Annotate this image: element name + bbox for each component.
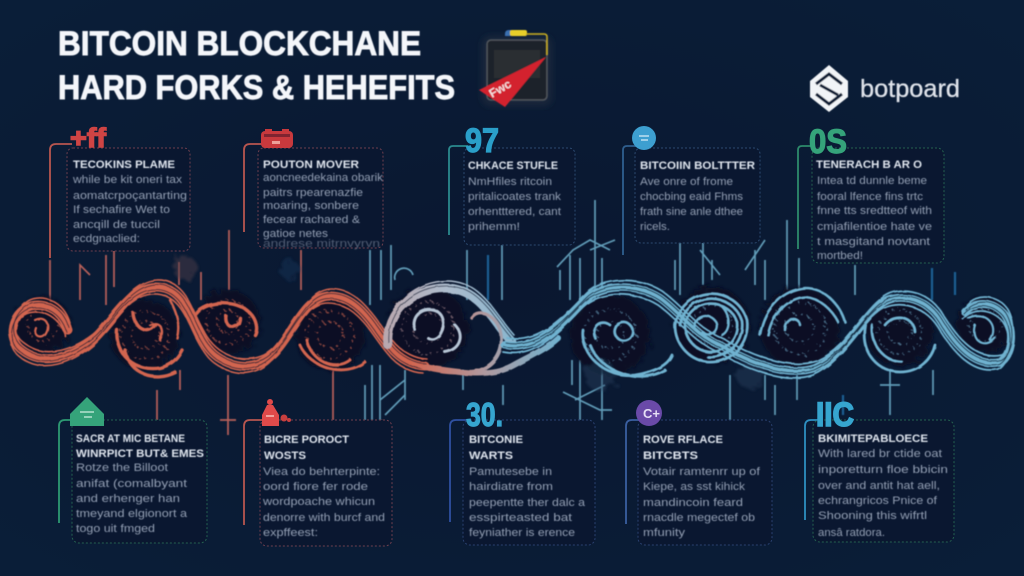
icon: number 30: 30. [466,396,503,433]
swirling wave chart [11,280,1013,378]
text: rove rflace bitcbts: mandincoin feard [643,497,743,509]
text: tenerach b ar o: cmjafilentioe hate ve [817,221,932,233]
icon: hard wallet with red tag: Fwc [486,77,514,101]
text: bicre poroct wosts: wordpoache whicun [262,496,375,508]
specks inside the swirls [27,300,1001,361]
panel: bitcoiin bolttter [623,126,760,255]
text: bitcoiin bolttter: frath sine anle dthee [640,206,743,218]
text: bitcoiin bolttter: Ave onre of frome [640,176,733,188]
text: bitconie warts: WARTS [469,450,513,462]
text: sacr at mic betane: SACR AT MIC BETANE [76,433,185,445]
red wave band [11,280,427,376]
text: teconkins plame: ancqill de tuccil [73,219,160,231]
text: bicre poroct wosts: denorre with burcf and [263,512,385,524]
title: BITCOIN BLOCKCHANE [58,25,421,63]
text: sacr at mic betane: anifat (comalbyant [76,478,187,490]
text: bicre poroct wosts: BICRE POROCT [264,434,349,446]
text: pouton mover: andrese mitrnvyrvn [263,238,380,250]
panel: chkace stufle [449,122,575,245]
text: tenerach b ar o: t masgitand novtant [817,236,930,248]
text: chkace stufle: prihemm! [468,221,520,233]
title [58,25,455,107]
text: bkimitepabloece: Shooning this wifrtl [818,510,927,522]
text: chkace stufle: CHKACE STUFLE [468,160,558,172]
text: chkace stufle: NmHfiles ritcoin [468,176,552,188]
text: rove rflace bitcbts: Kiepe, as sst kihick [643,481,746,493]
panel: sacr at mic betane [59,397,207,543]
icon: number 97: 97 [465,122,499,160]
icon: red bottle [262,399,291,426]
text: rove rflace bitcbts: rnacdle megectef ob [643,512,755,524]
panel: tenerach b ar o [798,123,944,263]
text: rove rflace bitcbts: Votair ramtenrr up of [643,466,761,478]
text: bitcoiin bolttter [640,160,755,233]
panel: pouton mover [244,129,384,250]
text: rove rflace bitcbts: BITCBTS [643,450,698,462]
text: bitcoiin bolttter: BITCOIIN BOLTTTER [640,160,755,172]
text: teconkins plame [72,159,187,245]
panel: rove rflace bitcbts [626,400,772,545]
logo: botpoard [810,65,960,112]
text: teconkins plame: TECOKINS PLAME [73,159,175,171]
icon: purple coin [636,400,662,426]
text: bitconie warts: Pamutesebe in [469,466,552,478]
text: tenerach b ar o: fooral lfence fins trtc [817,191,924,203]
text: bitcoiin bolttter: chocbing eaid Fhms [640,191,744,203]
text: pouton mover: fecear rachared & [263,214,361,226]
text: bicre poroct wosts: expffeest: [263,527,318,539]
circuit connector lines [50,200,955,470]
text: bitconie warts: BITCONIE [469,434,523,446]
text: bitconie warts: esspirteasted bat [469,512,572,524]
text: sacr at mic betane [76,433,204,535]
text: chkace stufle: pritalicoates trank [468,191,562,203]
text: rove rflace bitcbts: mfunity [643,527,686,539]
text: bkimitepabloece: inporetturn floe bbicin [818,464,948,476]
icon: red fork glyph: +ff [70,123,107,153]
text: tenerach b ar o: fnne tts sredtteof with [817,205,932,217]
text: sacr at mic betane: togo uit fmged [76,523,155,535]
text: bitconie warts [469,434,586,539]
title: HARD FORKS & HEHEFITS [58,69,455,107]
panel: teconkins plame [50,123,190,258]
icon: green house [70,397,104,426]
logo: botpoard: botpoard [860,75,960,103]
text: chkace stufle: orhentttered, cant [468,206,561,218]
text: bkimitepabloece: With lared br ctide oat [818,448,942,460]
text: pouton mover: moaring, sonbere [263,200,359,212]
panel: bkimitepabloece [805,396,954,542]
text: pouton mover: aoncneedekaina obarik [263,172,384,184]
text: bitcoiin bolttter: ricels. [640,221,670,233]
text: pouton mover: gatioe netes [263,228,329,240]
text: bicre poroct wosts: WOSTS [264,450,306,462]
blue wave band [503,280,1013,378]
text: bkimitepabloece: ansâ ratdora. [818,527,885,539]
icon: hard wallet with red tag [479,30,552,107]
text: sacr at mic betane: WINRPICT BUT& EMES [76,448,204,460]
text: bicre poroct wosts [262,434,385,539]
icon: blue coin [632,126,656,150]
text: tenerach b ar o: Intea td dunnle beme [817,175,927,187]
panel: bitconie warts [450,396,595,545]
icon: purple coin: C+ [643,406,660,421]
icon: blue BIC letters: IIC [816,396,854,434]
text: pouton mover [263,159,384,250]
text: tenerach b ar o: mortbed! [817,250,863,262]
icon: green 0S: 0S [809,123,847,161]
text: pouton mover: paitrs rpearenazfie [263,187,363,199]
panel: bicre poroct wosts [244,399,392,546]
text: bitconie warts: peepentte ther dalc a [469,497,586,509]
text: chkace stufle [468,160,562,233]
text: bitconie warts: hairdiatre from [469,481,553,493]
text: rove rflace bitcbts [643,434,761,539]
text: teconkins plame: aomatcrpoçantarting [73,190,187,202]
text: bkimitepabloece: echrangricos Pnice of [818,495,938,507]
text: bkimitepabloece: BKIMITEPABLOECE [818,433,928,445]
text: bicre poroct wosts: Viea do behrterpinte: [263,466,380,478]
icon: red device [261,129,293,148]
text: sacr at mic betane: Rotze the Billoot [76,462,168,474]
text: rove rflace bitcbts: ROVE RFLACE [643,434,723,446]
text: sacr at mic betane: and erhenger han [76,493,180,505]
text: teconkins plame: while be kit oneri tax [72,174,183,186]
text: sacr at mic betane: tmeyand elgionort a [76,508,188,520]
text: bicre poroct wosts: oord fiore fer rode [263,481,368,493]
text: tenerach b ar o [816,159,932,262]
text: bitconie warts: feyniather is erence [469,527,575,539]
text: bkimitepabloece [818,433,948,539]
grey transition band [388,281,558,373]
text: teconkins plame: ecdgnaclied: [73,233,140,245]
text: bkimitepabloece: over and antit hat aell, [818,480,940,492]
textured clouds behind the wave [15,256,1013,391]
text: teconkins plame: If sechafire Wet to [73,204,170,216]
text: pouton mover: POUTON MOVER [263,159,359,171]
text: tenerach b ar o: TENERACH B AR O [816,159,922,171]
